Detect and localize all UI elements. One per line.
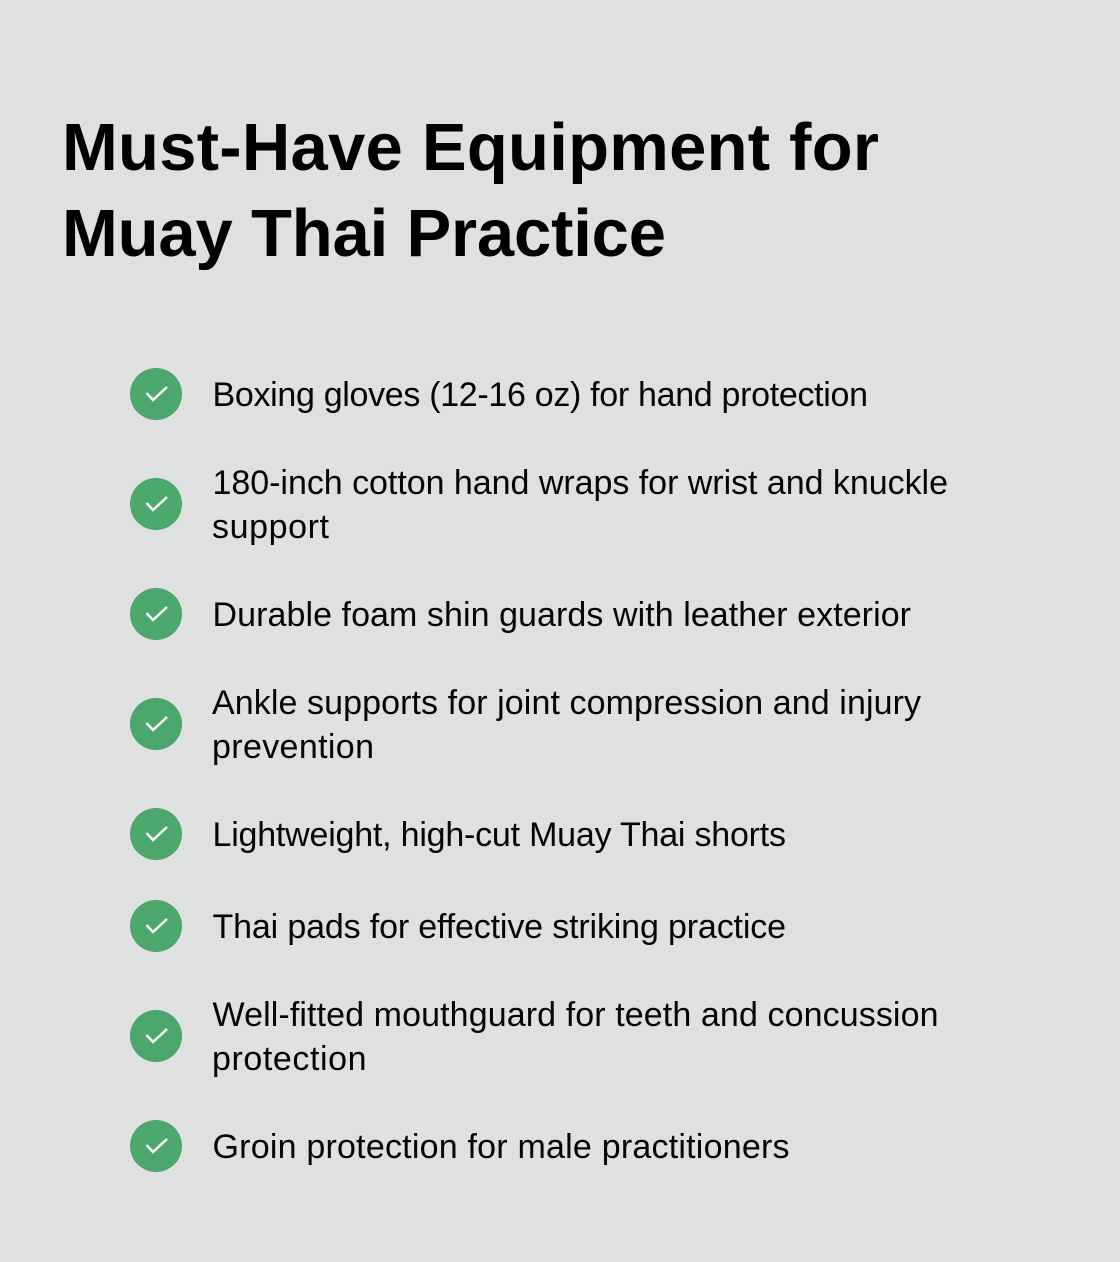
icon: check circle [130, 588, 182, 640]
checklist item: ankle supports [130, 684, 921, 766]
icon: check circle [130, 698, 182, 750]
item text: 180-inch cotton hand wraps for wrist and knuckle [212, 464, 948, 502]
item text: prevention [212, 728, 374, 766]
checklist item: groin protection [130, 1120, 790, 1172]
checklist item: shorts [130, 808, 786, 860]
title: Muay Thai Practice [62, 196, 666, 271]
icon: check circle [130, 478, 182, 530]
item text: Well-fitted mouthguard for teeth and concussion [212, 996, 938, 1034]
item text [212, 684, 921, 766]
title [62, 110, 879, 271]
item text: Thai pads for effective striking practice [212, 908, 786, 946]
checklist item: boxing gloves [130, 368, 868, 420]
item text: support [212, 508, 330, 546]
item text: Durable foam shin guards with leather exterior [212, 596, 911, 634]
item text: Groin protection for male practitioners [212, 1128, 790, 1166]
checklist item: hand wraps [130, 464, 948, 546]
icon: check circle [130, 900, 182, 952]
item text [212, 464, 948, 546]
icon: check circle [130, 1120, 182, 1172]
item text [212, 996, 938, 1078]
item text: Ankle supports for joint compression and injury [212, 684, 921, 722]
icon: check circle [130, 1010, 182, 1062]
item text: Boxing gloves (12-16 oz) for hand protection [212, 376, 868, 414]
icon: check circle [130, 368, 182, 420]
icon: check circle [130, 808, 182, 860]
checklist item: mouthguard [130, 996, 938, 1078]
checklist item: shin guards [130, 588, 911, 640]
item text: Lightweight, high-cut Muay Thai shorts [212, 816, 786, 854]
title: Must-Have Equipment for [62, 110, 879, 185]
checklist item: thai pads [130, 900, 786, 952]
item text: protection [212, 1040, 366, 1078]
